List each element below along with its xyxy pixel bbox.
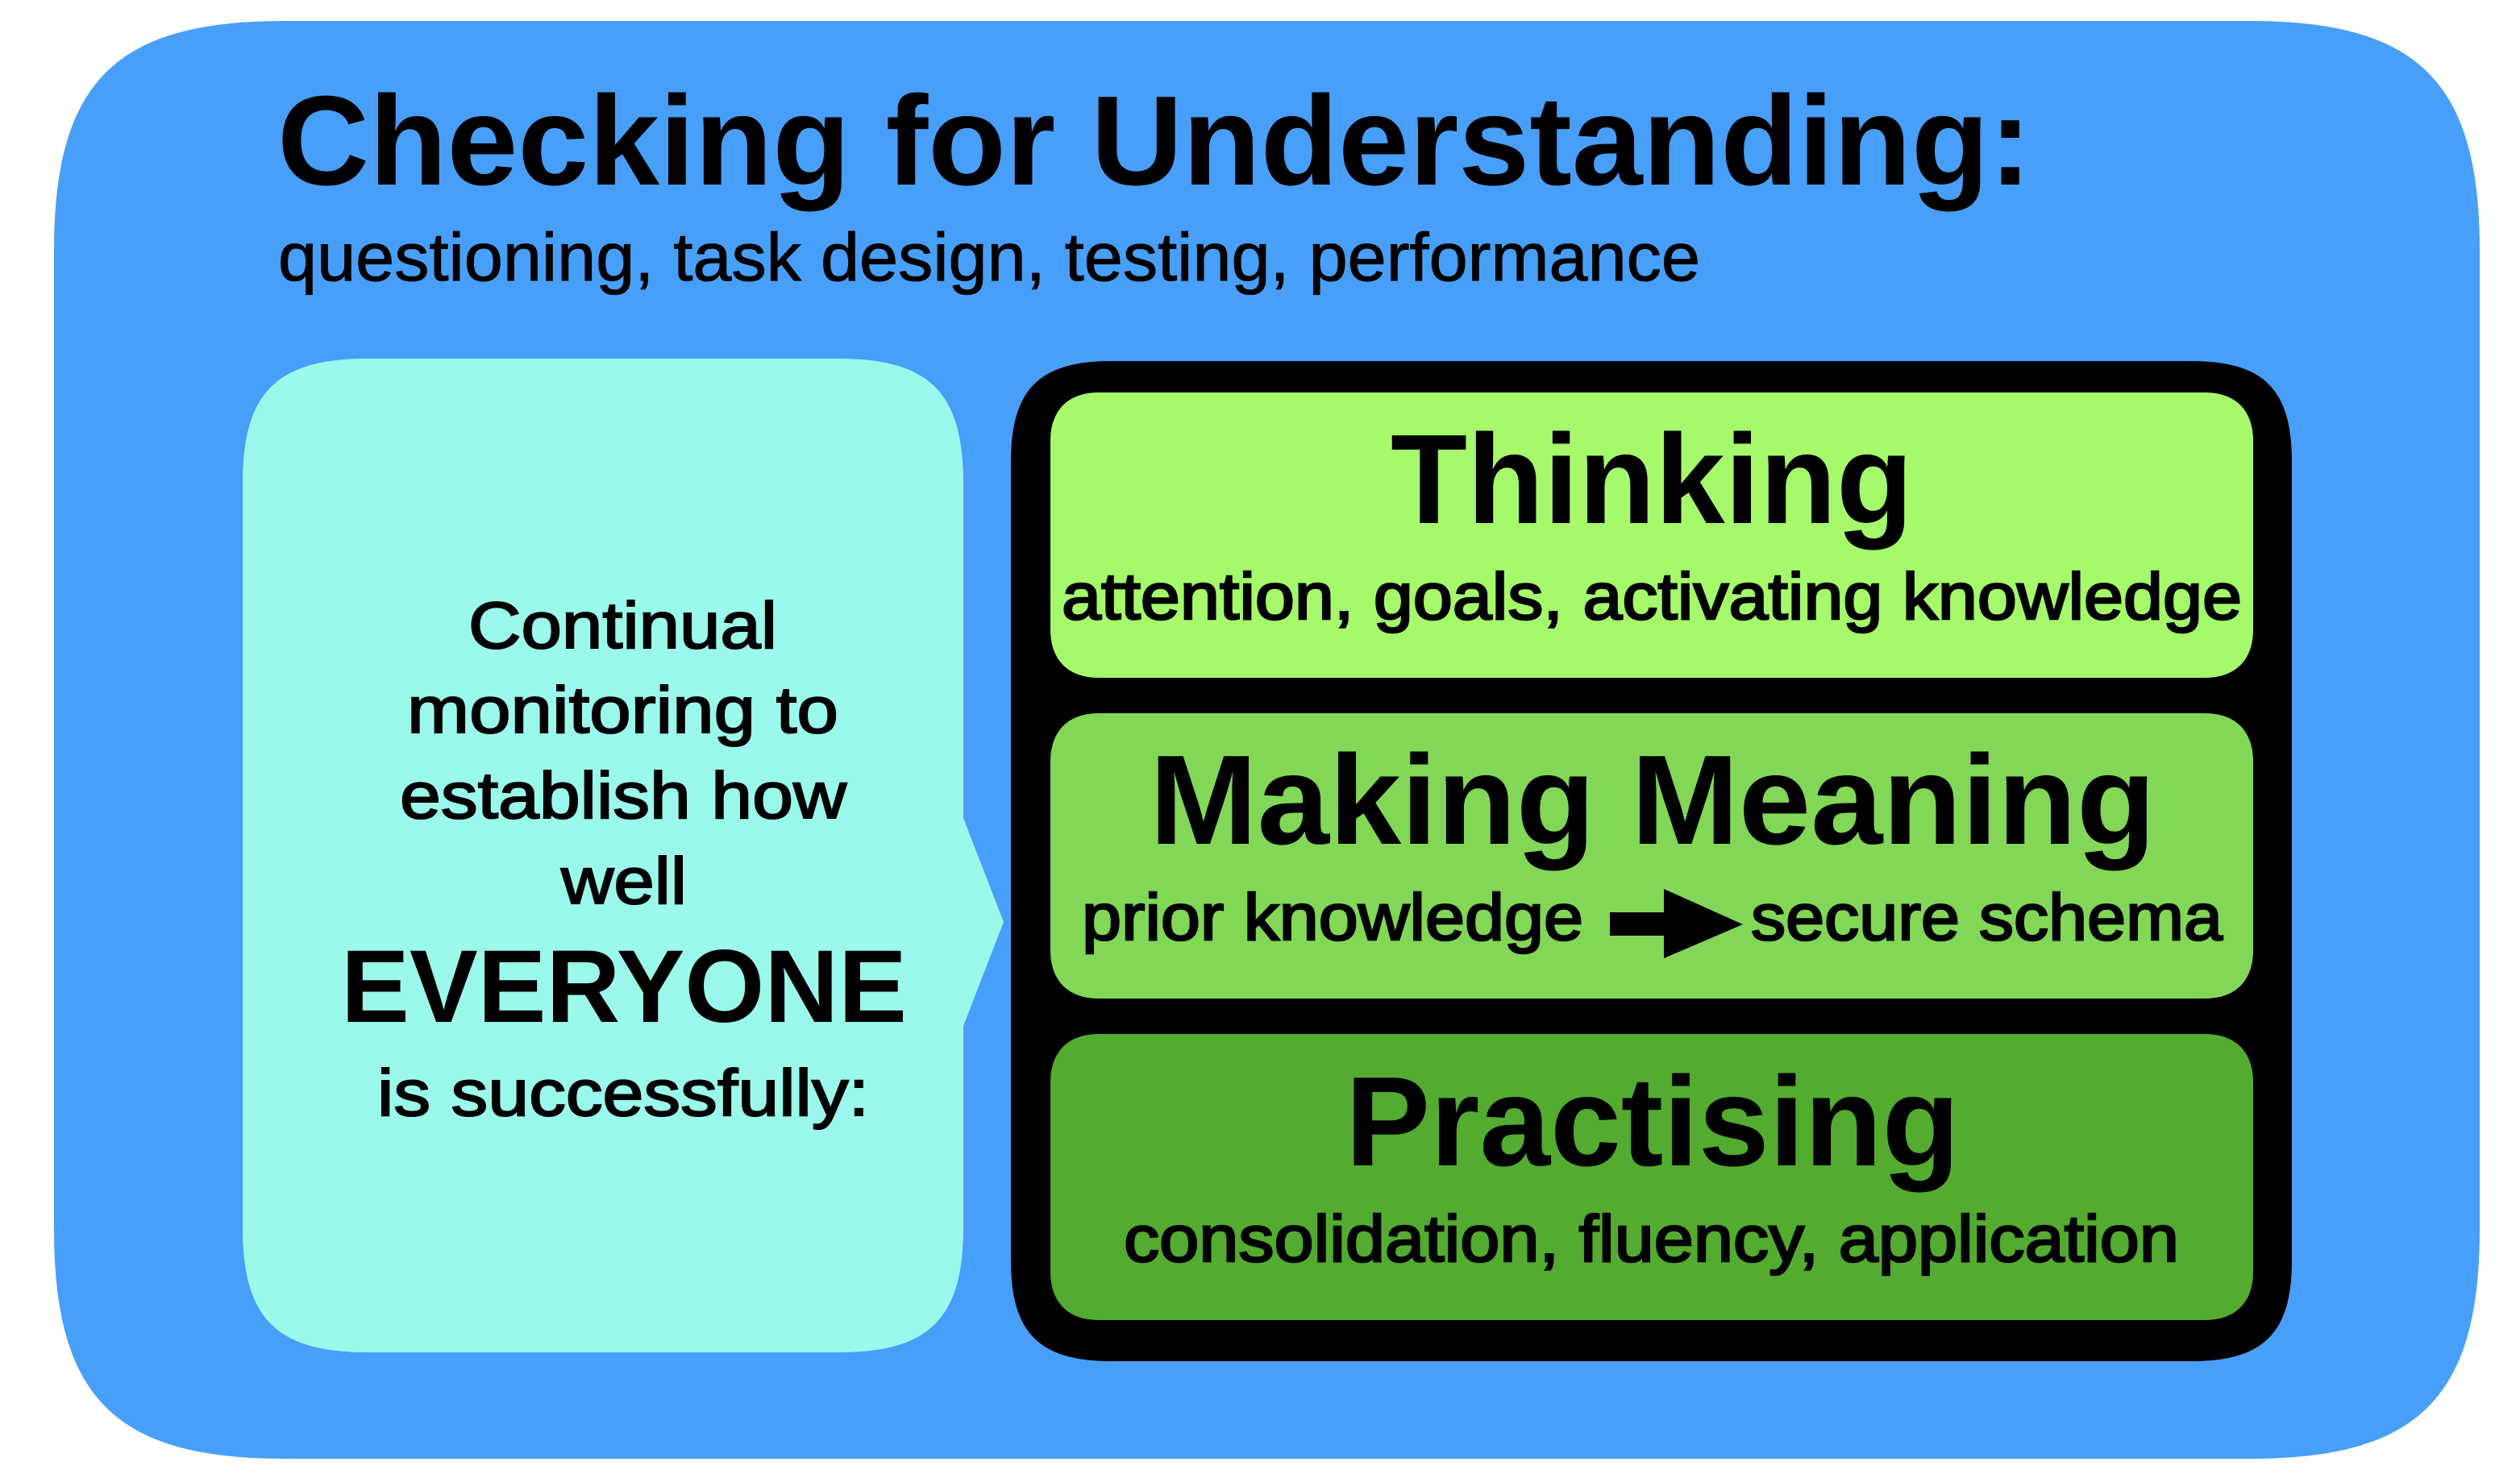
callout text <box>341 589 907 1130</box>
thinking heading: Thinking <box>1391 409 1913 550</box>
callout text: EVERYONE <box>341 929 907 1044</box>
making meaning background <box>1050 713 2253 999</box>
subtitle: questioning, task design, testing, performance <box>278 219 1700 295</box>
callout shape with arrow point <box>243 359 1004 1352</box>
secure schema label: secure schema <box>1751 881 2223 954</box>
callout text: Continual <box>468 589 777 662</box>
panel: practising <box>1050 1034 2253 1320</box>
title: Checking for Understanding: <box>277 70 2031 212</box>
arrow <box>1610 889 1743 958</box>
panel: black frame with stages <box>1011 361 2292 1361</box>
thinking background <box>1050 392 2253 678</box>
panel: thinking <box>1050 392 2253 678</box>
practising background <box>1050 1034 2253 1320</box>
prior knowledge label: prior knowledge <box>1082 881 1583 954</box>
practising heading: Practising <box>1345 1051 1960 1193</box>
callout text: establish how <box>400 759 847 833</box>
thinking description: attention, goals, activating knowledge <box>1062 560 2242 633</box>
panel: continual monitoring callout <box>243 359 1004 1352</box>
black frame <box>1011 361 2292 1361</box>
panel: making meaning <box>1050 713 2253 999</box>
callout text: monitoring to <box>407 674 838 747</box>
practising description: consolidation, fluency, application <box>1124 1202 2179 1276</box>
callout text: is successfully: <box>377 1057 869 1130</box>
making meaning heading: Making Meaning <box>1150 729 2156 871</box>
callout text: well <box>560 845 687 918</box>
